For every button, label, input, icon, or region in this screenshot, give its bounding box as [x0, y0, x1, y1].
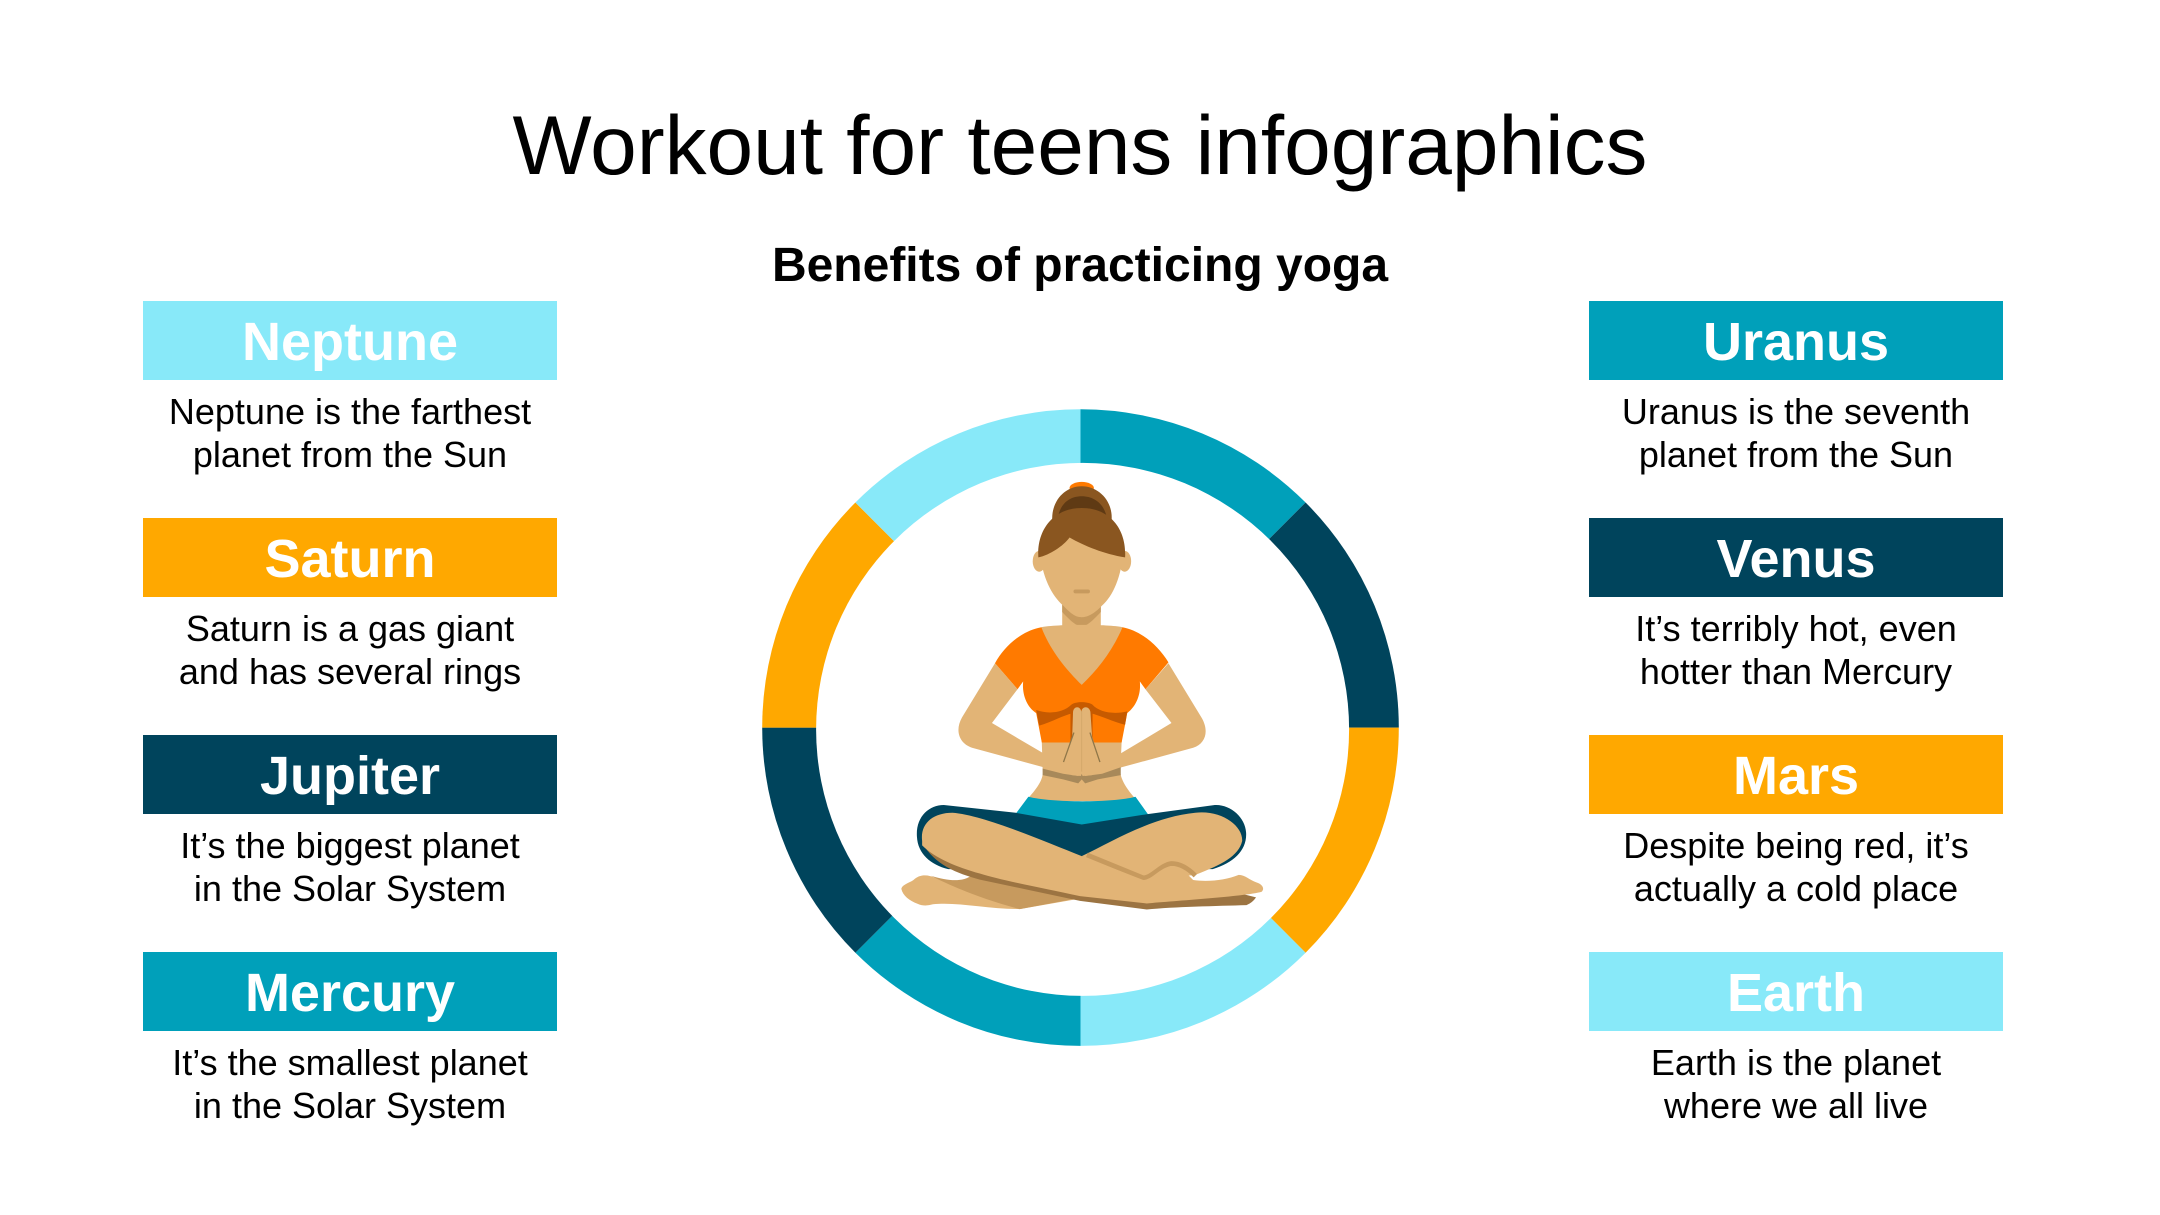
- text: Jupiter description: [180, 825, 520, 909]
- title: Workout for teens infographics: [513, 98, 1647, 192]
- heading: Neptune: Neptune: [242, 312, 458, 372]
- text: Neptune description: planet from the Sun: [193, 434, 507, 475]
- text: Neptune description: [169, 391, 531, 475]
- panel: Mars: [1589, 735, 2003, 909]
- heading: Mars: Mars: [1733, 746, 1859, 806]
- head and neck: [1033, 529, 1131, 629]
- text: Mars description: Despite being red, it’s: [1623, 825, 1969, 866]
- text: Saturn description: and has several rings: [179, 651, 521, 692]
- text: Saturn description: [179, 608, 521, 692]
- panel: Mercury: [143, 952, 557, 1126]
- subtitle: Benefits of practicing yoga: [772, 239, 1388, 292]
- panel: Jupiter: [143, 735, 557, 909]
- hair bun: [1052, 482, 1112, 520]
- yoga figure: [901, 482, 1263, 910]
- text: Neptune description: Neptune is the farthest: [169, 391, 531, 432]
- text: Earth description: where we all live: [1664, 1085, 1928, 1126]
- text: Venus description: hotter than Mercury: [1640, 651, 1952, 692]
- panel: Venus: [1589, 518, 2003, 692]
- far leg and foot: [901, 875, 1087, 909]
- panel: Saturn: [143, 518, 557, 692]
- heading: Mars: [1589, 735, 2003, 814]
- back thigh: [1082, 812, 1242, 882]
- hair front: [1038, 508, 1125, 557]
- heading: Mercury: Mercury: [245, 963, 455, 1023]
- torso skin: [1025, 625, 1138, 801]
- heading: Neptune: [143, 301, 557, 380]
- heading: Uranus: [1589, 301, 2003, 380]
- text: Mars description: [1623, 825, 1969, 909]
- heading: Saturn: Saturn: [264, 529, 436, 589]
- text: Jupiter description: It’s the biggest planet: [180, 825, 520, 866]
- heading: Mercury: [143, 952, 557, 1031]
- text: Uranus description: planet from the Sun: [1639, 434, 1953, 475]
- text: Uranus description: [1622, 391, 1970, 475]
- text: Venus description: It’s terribly hot, even: [1635, 608, 1957, 649]
- text: Jupiter description: in the Solar System: [194, 868, 506, 909]
- text: Uranus description: Uranus is the seventh: [1622, 391, 1970, 432]
- heading: Jupiter: Jupiter: [260, 746, 440, 806]
- segmented ring: [762, 409, 1399, 1046]
- panel: Earth: [1589, 952, 2003, 1126]
- arms and hands: [958, 663, 1206, 783]
- front leg and foot: [922, 813, 1263, 910]
- text: Saturn description: Saturn is a gas giant: [186, 608, 514, 649]
- heading: Venus: [1589, 518, 2003, 597]
- text: Earth description: Earth is the planet: [1651, 1042, 1941, 1083]
- leggings: [917, 805, 1246, 869]
- text: Mercury description: It’s the smallest planet: [172, 1042, 528, 1083]
- text: Mercury description: in the Solar System: [194, 1085, 506, 1126]
- heading: Jupiter: [143, 735, 557, 814]
- heading: Venus: Venus: [1716, 529, 1876, 589]
- heading: Earth: [1589, 952, 2003, 1031]
- text: Earth description: [1651, 1042, 1941, 1126]
- panel: Uranus: [1589, 301, 2003, 475]
- shirt: [995, 627, 1168, 743]
- text: Mars description: actually a cold place: [1634, 868, 1958, 909]
- text: Venus description: [1635, 608, 1957, 692]
- panel: Neptune: [143, 301, 557, 475]
- shorts: [1016, 797, 1148, 827]
- heading: Earth: Earth: [1727, 963, 1865, 1023]
- heading: Saturn: [143, 518, 557, 597]
- heading: Uranus: Uranus: [1703, 312, 1889, 372]
- text: Mercury description: [172, 1042, 528, 1126]
